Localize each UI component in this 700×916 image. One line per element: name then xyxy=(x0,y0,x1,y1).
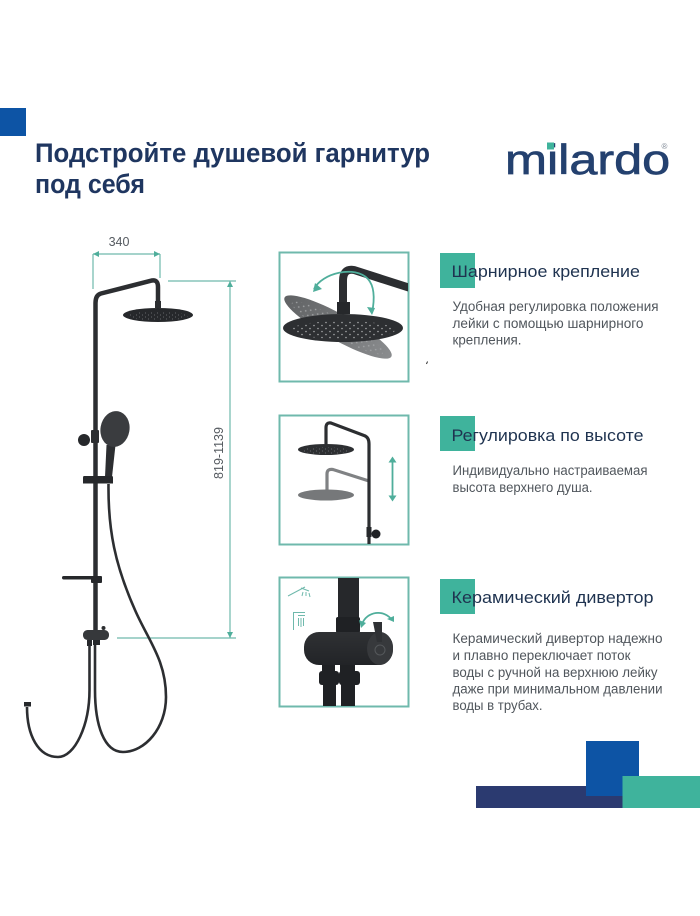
feature 1: hinged mount: лейки с помощью шарнирного xyxy=(452,316,644,331)
title xyxy=(35,138,430,199)
soap shelf xyxy=(62,576,102,583)
stray tick mark xyxy=(426,362,428,364)
logo: milardo: milardo xyxy=(505,136,670,183)
knob xyxy=(366,527,372,537)
icon: overhead shower xyxy=(288,587,310,597)
feature 2: height adjustment: Регулировка по высоте xyxy=(452,426,644,445)
decorative corner blocks xyxy=(476,741,700,808)
feature 3: ceramic diverter: и плавно переключает поток xyxy=(452,648,631,663)
main shower head xyxy=(283,314,403,342)
lower ghost shower xyxy=(298,469,369,500)
arm and neck xyxy=(343,270,410,304)
feature 1: hinged mount: Шарнирное крепление xyxy=(452,262,640,281)
feature 1: hinged mount xyxy=(440,253,658,348)
height dimension 819-1139 xyxy=(117,281,236,638)
feature 3: ceramic diverter: даже при минимальном давлении xyxy=(452,682,662,696)
feature 2: height adjustment xyxy=(440,416,648,495)
feature 1: hinged mount: крепления. xyxy=(452,332,522,348)
diverter body xyxy=(83,626,109,646)
rotation arrow xyxy=(362,613,392,624)
feature 3: ceramic diverter xyxy=(440,579,662,713)
corner accent square xyxy=(0,108,26,136)
panel: ceramic diverter image xyxy=(280,578,408,708)
feature 3: ceramic diverter: воды с ручной на верхнюю лейку xyxy=(452,665,658,680)
width dimension 340: 340 xyxy=(109,235,129,249)
feature 3: ceramic diverter: Керамический дивертор xyxy=(452,588,654,607)
shower column and arm xyxy=(96,280,158,634)
upper shower xyxy=(298,423,369,545)
panel: hinged mount image xyxy=(278,252,410,382)
feature 3: ceramic diverter: Керамический дивертор надежно xyxy=(452,631,662,646)
infographic canvas xyxy=(0,108,700,808)
title: под себя xyxy=(35,169,145,199)
vertical double arrow xyxy=(388,456,396,502)
hoses and nuts xyxy=(319,663,360,708)
feature 1: hinged mount: Удобная регулировка положения xyxy=(452,299,658,314)
feature 3: ceramic diverter: воды в трубах. xyxy=(452,698,542,713)
icon: hand shower xyxy=(294,612,305,630)
wall knob xyxy=(78,434,90,446)
slider bracket xyxy=(83,476,113,484)
hoses xyxy=(95,484,166,752)
feature 2: height adjustment: Индивидуально настраиваемая xyxy=(452,463,648,478)
ghost shower head xyxy=(284,295,392,359)
lever xyxy=(373,622,382,632)
feature 2: height adjustment: высота верхнего душа. xyxy=(452,480,592,495)
logo: milardo: ® xyxy=(662,142,668,151)
overhead shower head xyxy=(123,301,193,322)
title: Подстройте душевой гарнитур xyxy=(35,138,430,168)
height dimension 819-1139: 819-1139 xyxy=(212,427,226,479)
panel: height adjustment image xyxy=(280,416,408,545)
product diagram: shower set xyxy=(24,235,236,757)
width dimension 340 xyxy=(93,235,160,289)
diverter body xyxy=(304,632,393,665)
hand shower xyxy=(98,409,132,477)
pipe and collar xyxy=(338,578,359,618)
rotation arrow xyxy=(314,272,374,313)
